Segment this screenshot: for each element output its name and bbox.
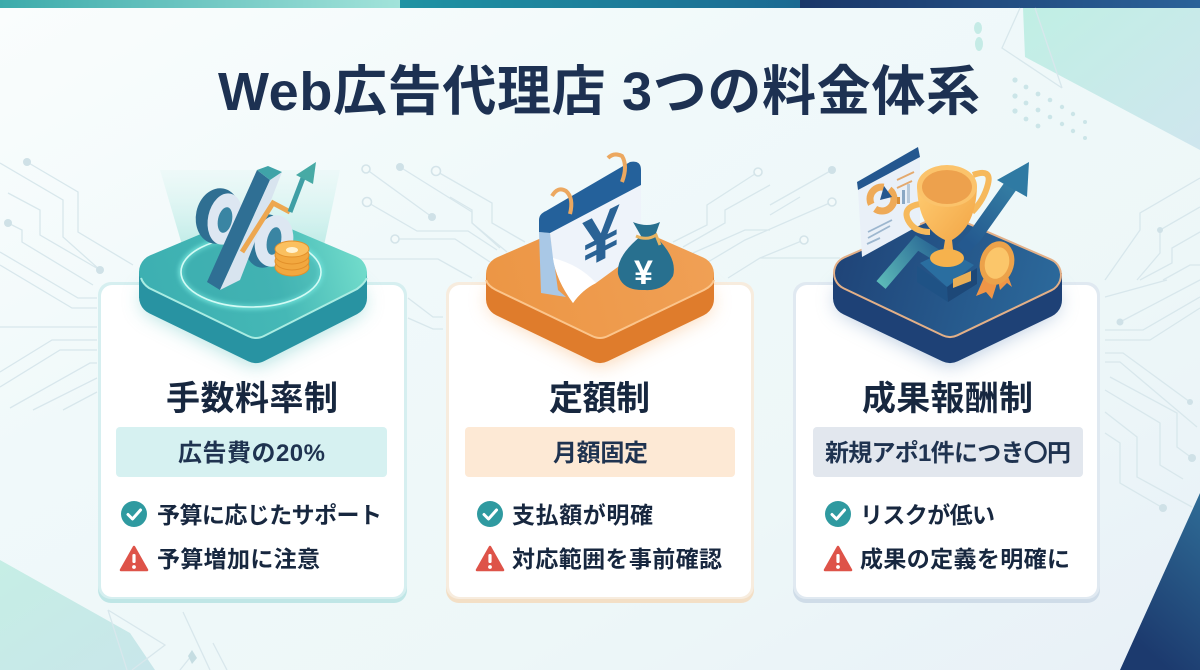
icon: trophy on navy platform [833, 147, 1062, 350]
icon: percent on teal platform [139, 162, 367, 350]
card background [793, 282, 1100, 603]
panel: 手数料率制 [98, 282, 407, 603]
panel: 成果報酬制 [793, 282, 1100, 603]
rate pill: 広告費の20% [178, 440, 325, 467]
bottom right navy shape [1120, 493, 1200, 670]
calendar page [539, 154, 641, 303]
rate pill [813, 427, 1083, 477]
heading: 定額制 [549, 380, 650, 418]
heading: 手数料率制 [166, 380, 338, 418]
card background [446, 282, 754, 603]
merit: 予算に応じたサポート [157, 502, 382, 528]
money bag: ¥ [634, 254, 653, 292]
growth arrow [242, 162, 316, 252]
title: Web広告代理店 3つの料金体系 [218, 62, 980, 122]
coins [275, 241, 309, 276]
rate pill [116, 427, 387, 477]
growth arrow [881, 162, 1029, 285]
heading: 成果報酬制 [862, 380, 1033, 418]
merit: リスクが低い [860, 502, 995, 528]
rate pill: 新規アポ1件につき〇円 [825, 440, 1071, 467]
top colour bar [0, 0, 1200, 8]
caution: 対応範囲を事前確認 [512, 546, 722, 572]
report panel [857, 147, 920, 257]
rate pill: 月額固定 [553, 440, 648, 467]
medal [975, 237, 1019, 299]
right zero [240, 210, 298, 272]
icon: calendar on orange platform [486, 154, 714, 350]
merit: 支払額が明確 [512, 502, 653, 528]
slash [207, 166, 282, 290]
left zero [191, 184, 247, 248]
rate pill [465, 427, 735, 477]
trophy [906, 165, 989, 302]
caution: 予算増加に注意 [157, 546, 320, 572]
caution: 成果の定義を明確に [860, 546, 1070, 572]
circuit lines [0, 158, 1200, 512]
panel: 定額制 [446, 282, 754, 603]
bottom left geometric shape [0, 560, 227, 670]
money bag [618, 222, 674, 292]
top right geometric shape [974, 8, 1200, 150]
calendar page: ¥ [582, 191, 620, 285]
card background [98, 282, 407, 603]
